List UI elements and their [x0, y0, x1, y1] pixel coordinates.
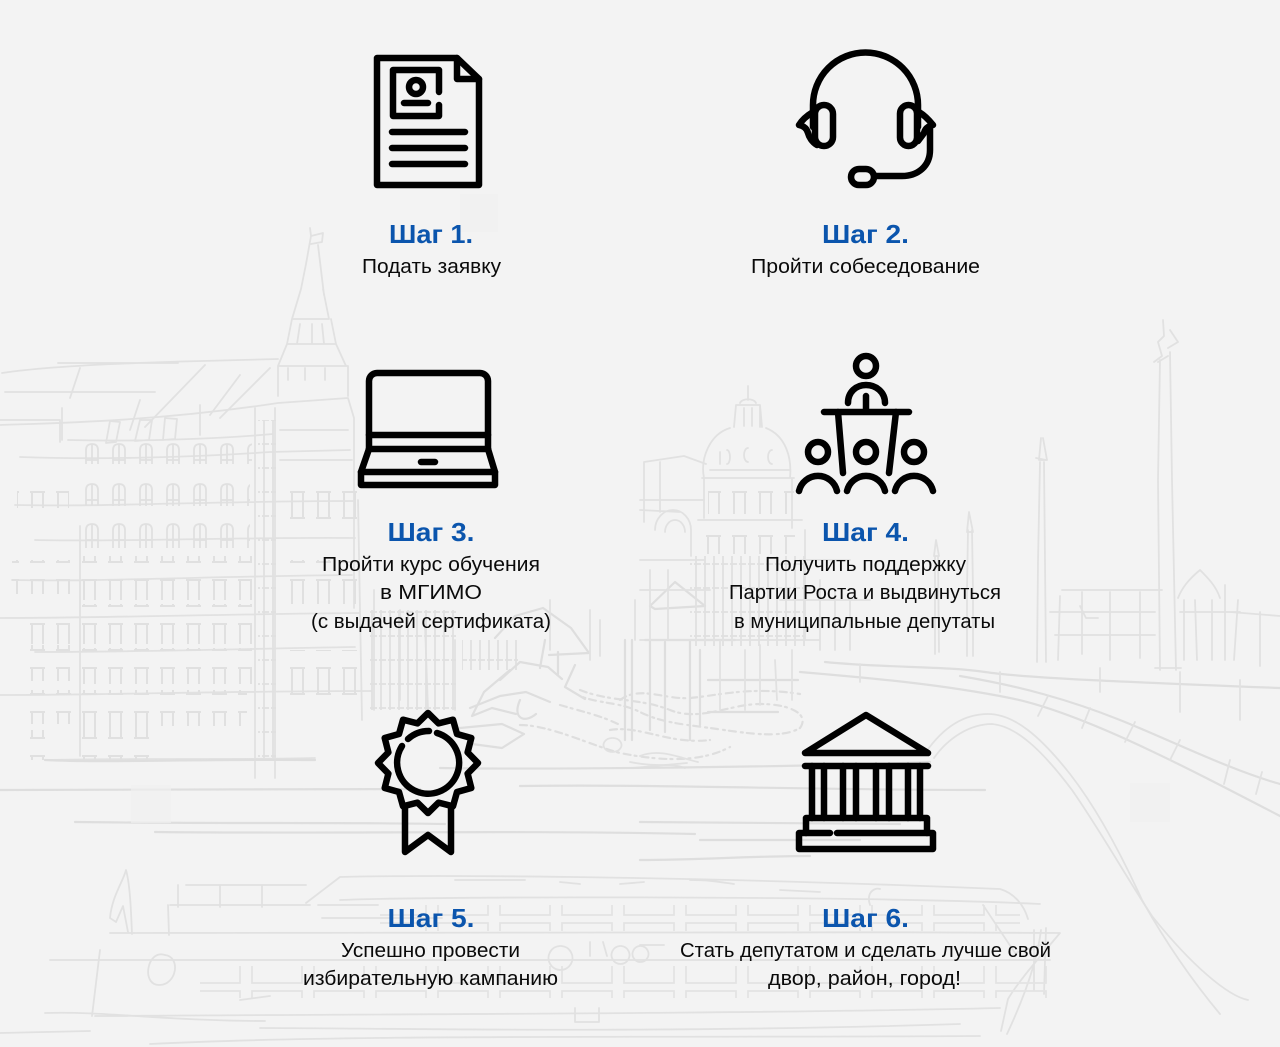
heading: step 6: Шаг 6. [822, 903, 909, 933]
text: step 1: Подать заявку [362, 255, 502, 278]
sketch: river lines [0, 760, 985, 860]
step 1 [362, 58, 502, 278]
icon: headset [799, 52, 933, 185]
icon: rosette award [378, 713, 478, 852]
text: step 5: избирательную кампанию [303, 967, 558, 990]
step 2 [751, 52, 980, 278]
text: step 6 [680, 939, 1051, 990]
text: step 3: Пройти курс обучения [322, 553, 540, 576]
heading: step 5: Шаг 5. [388, 903, 474, 933]
heading: step 3: Шаг 3. [388, 517, 474, 547]
text: step 5: Успешно провести [341, 939, 520, 962]
sketch: boat [0, 870, 1060, 1044]
icon: laptop [361, 373, 495, 485]
heading: step 4: Шаг 4. [822, 517, 909, 547]
step 5 [303, 713, 558, 990]
heading: step 1: Шаг 1. [389, 219, 473, 249]
text: step 5 [303, 939, 558, 990]
icon: government building [799, 715, 933, 849]
sketch: centre houses and trees [358, 500, 803, 768]
text: step 3: (с выдачей сертификата) [311, 610, 551, 633]
text: step 4: в муниципальные депутаты [734, 610, 995, 633]
text: step 2: Пройти собеседование [751, 255, 980, 278]
heading: step 2: Шаг 2. [822, 219, 909, 249]
text: step 3 [311, 553, 551, 633]
text: step 4 [729, 553, 1001, 633]
icon: application document [377, 58, 479, 185]
sketch: domed building [640, 386, 870, 650]
step 3 [311, 373, 551, 633]
sketch: left building with tower [0, 228, 372, 778]
sketch: embankment and bridge [800, 662, 1280, 1014]
text: step 6: двор, район, город! [768, 967, 961, 990]
sketch: right spires and low buildings [934, 320, 1280, 670]
step 4 [729, 356, 1001, 633]
icon: speaker and audience [799, 356, 933, 491]
text: step 4: Получить поддержку [765, 553, 967, 576]
faint watermark squares [131, 194, 1170, 823]
text: step 6: Стать депутатом и сделать лучше свой [680, 939, 1051, 962]
text: step 3: в МГИМО [380, 581, 482, 604]
text: step 4: Партии Роста и выдвинуться [729, 581, 1001, 604]
step 6 [680, 715, 1051, 990]
